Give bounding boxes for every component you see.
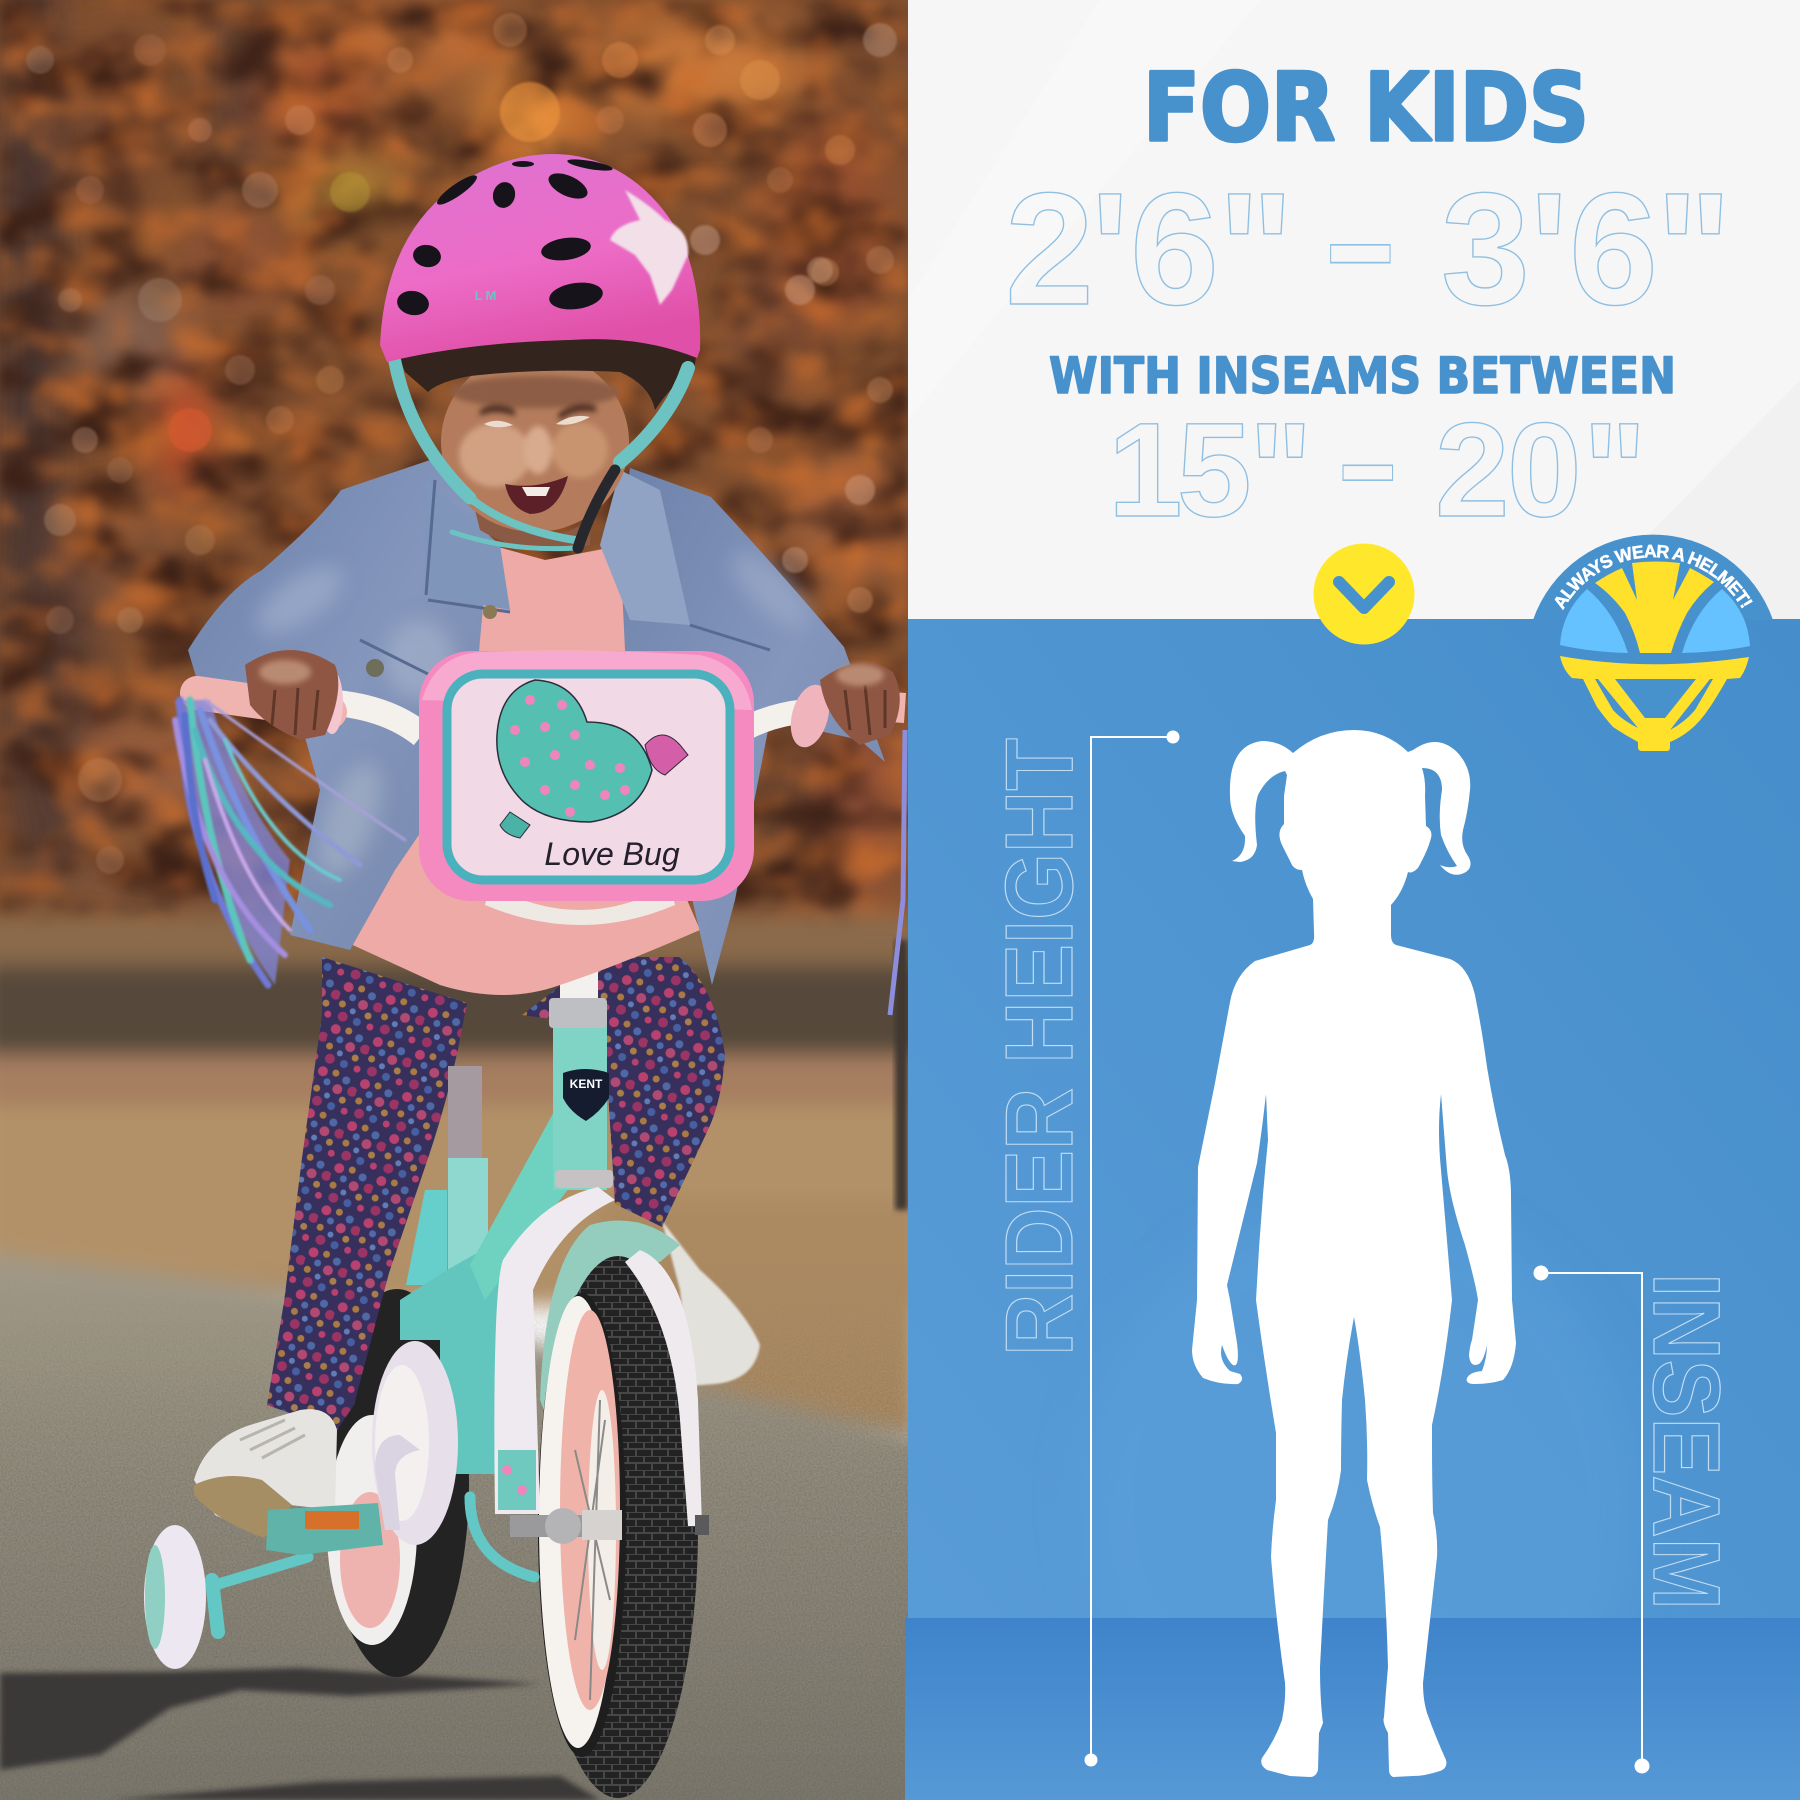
ladybug graphic bbox=[645, 735, 688, 775]
front wheel bbox=[538, 1256, 698, 1798]
training wheel arm bbox=[212, 1497, 534, 1632]
denim jacket bbox=[188, 457, 885, 985]
handlebar and grips bbox=[197, 670, 905, 752]
floor band bbox=[905, 1618, 1800, 1800]
photo background: grass and shaded ground bbox=[0, 915, 940, 1440]
outlined inseam range: 20" bbox=[1435, 396, 1647, 545]
panel: blue body background bbox=[908, 619, 1800, 1800]
heart graphic bbox=[497, 680, 652, 838]
badge curved text: ALWAYS WEAR A HELMET! bbox=[1554, 544, 1753, 610]
icon: always wear a helmet badge bbox=[1533, 534, 1772, 751]
panel: bike photo bbox=[0, 0, 940, 1800]
fork and axle bbox=[494, 1187, 709, 1544]
panel: header background bbox=[908, 0, 1800, 620]
helmet top yellow bbox=[1595, 562, 1714, 653]
helmet unicorn decal bbox=[610, 190, 688, 305]
outlined dash: height range: – bbox=[1327, 141, 1394, 341]
helmet strap openings bbox=[1595, 679, 1713, 730]
child silhouette bbox=[1192, 730, 1516, 1777]
kent head badge bbox=[563, 1069, 609, 1121]
bokeh highlights bbox=[26, 13, 897, 874]
right shoe bbox=[662, 1221, 760, 1386]
training wheel guard bbox=[372, 1341, 458, 1545]
outlined height range: 3'6" bbox=[1441, 159, 1732, 338]
road shadows bbox=[0, 1668, 600, 1800]
front fender bbox=[540, 1220, 680, 1420]
training wheel bbox=[144, 1525, 206, 1669]
pedal bbox=[266, 1503, 383, 1555]
inseam measure line bbox=[1534, 1266, 1650, 1774]
outlined height range: 2'6" bbox=[1005, 159, 1294, 338]
left handlebar streamers bbox=[175, 700, 405, 985]
helmet right panel bbox=[1682, 589, 1750, 653]
helmet vents bbox=[395, 157, 613, 318]
helmet straps bbox=[395, 362, 688, 549]
hands bbox=[245, 650, 900, 745]
photo background: tree trunk at right edge bbox=[895, 940, 908, 1210]
rider height label: RIDER HEIGHT bbox=[986, 738, 1093, 1356]
subheading: with inseams between: WITH INSEAMS BETWEEN bbox=[1049, 347, 1676, 405]
pink helmet bbox=[380, 154, 700, 362]
title: for kids: FOR KIDS bbox=[1143, 54, 1589, 163]
rear wheel bbox=[325, 1289, 469, 1677]
kent head badge: KENT bbox=[570, 1077, 603, 1091]
icon: yellow chevron button bbox=[1314, 544, 1414, 644]
child: right leg bbox=[522, 957, 725, 1227]
bike frame bbox=[400, 911, 613, 1474]
inseam label: INSEAM bbox=[1633, 1273, 1739, 1610]
love bug lettering: Love Bug bbox=[544, 836, 680, 872]
outlined dash: inseam range: – bbox=[1340, 379, 1396, 546]
outlined inseam range: 15" bbox=[1108, 396, 1313, 545]
handlebar bag bbox=[419, 651, 754, 925]
child face bbox=[392, 335, 698, 550]
right handlebar streamers bbox=[890, 730, 905, 1015]
rider height measure line bbox=[1084, 730, 1180, 1766]
helmet logo: LM bbox=[475, 288, 499, 303]
photo background: autumn foliage bbox=[0, 0, 930, 965]
helmet left panel bbox=[1560, 589, 1628, 653]
road bbox=[0, 1250, 940, 1800]
pink dress bbox=[344, 545, 700, 995]
helmet brim and straps bbox=[1560, 656, 1749, 751]
child: left leg bbox=[267, 957, 467, 1430]
left shoe bbox=[194, 1409, 337, 1538]
